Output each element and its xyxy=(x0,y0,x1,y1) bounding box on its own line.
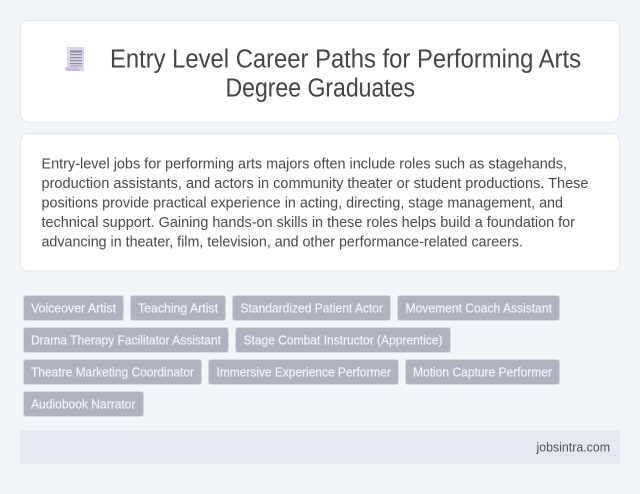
title xyxy=(110,46,581,102)
text block: description: technical support. Gaining hands-on skills in these roles helps build a foundation for xyxy=(42,215,575,231)
tag: Movement Coach Assistant: Movement Coach Assistant xyxy=(406,301,553,315)
text block: description: positions provide practical experience in acting, directing, stage management, and xyxy=(42,196,563,212)
panel: header xyxy=(20,20,620,122)
text block: description xyxy=(42,156,588,250)
tag: Voiceover Artist: Voiceover Artist xyxy=(31,301,117,315)
tag: Teaching Artist: Teaching Artist xyxy=(138,301,219,315)
tag: Motion Capture Performer xyxy=(406,360,560,384)
tag: Teaching Artist xyxy=(130,296,226,320)
tag: Motion Capture Performer: Motion Capture Performer xyxy=(413,365,552,379)
tag: Theatre Marketing Coordinator xyxy=(24,360,202,384)
text block: description: advancing in theater, film, television, and other performance-related careers. xyxy=(42,234,523,250)
tag: Drama Therapy Facilitator Assistant xyxy=(24,328,228,352)
tag: Immersive Experience Performer xyxy=(208,360,398,384)
title: Degree Graduates xyxy=(226,74,415,102)
tag: Stage Combat Instructor (Apprentice): Stage Combat Instructor (Apprentice) xyxy=(244,333,442,347)
tag: Audiobook Narrator xyxy=(24,392,144,416)
tag list xyxy=(24,296,560,416)
footer source text: jobsintra.com xyxy=(536,440,610,454)
tag: Standardized Patient Actor: Standardized Patient Actor xyxy=(240,301,383,315)
icon: document scroll xyxy=(65,47,84,71)
text block: description: Entry-level jobs for performing arts majors often include roles such as stagehands, xyxy=(42,156,567,172)
title: Entry Level Career Paths for Performing Arts xyxy=(110,46,581,74)
tag: Stage Combat Instructor (Apprentice) xyxy=(236,328,450,352)
footer bar xyxy=(20,430,620,464)
panel: description xyxy=(20,134,620,271)
tag: Theatre Marketing Coordinator: Theatre Marketing Coordinator xyxy=(31,365,194,379)
tag: Standardized Patient Actor xyxy=(232,296,390,320)
tag: Drama Therapy Facilitator Assistant: Drama Therapy Facilitator Assistant xyxy=(31,333,222,347)
tag: Immersive Experience Performer: Immersive Experience Performer xyxy=(216,365,391,379)
tag: Audiobook Narrator: Audiobook Narrator xyxy=(31,397,136,411)
tag: Voiceover Artist xyxy=(24,296,124,320)
tag: Movement Coach Assistant xyxy=(398,296,560,320)
text block: description: production assistants, and actors in community theater or student productions. These xyxy=(42,176,588,192)
